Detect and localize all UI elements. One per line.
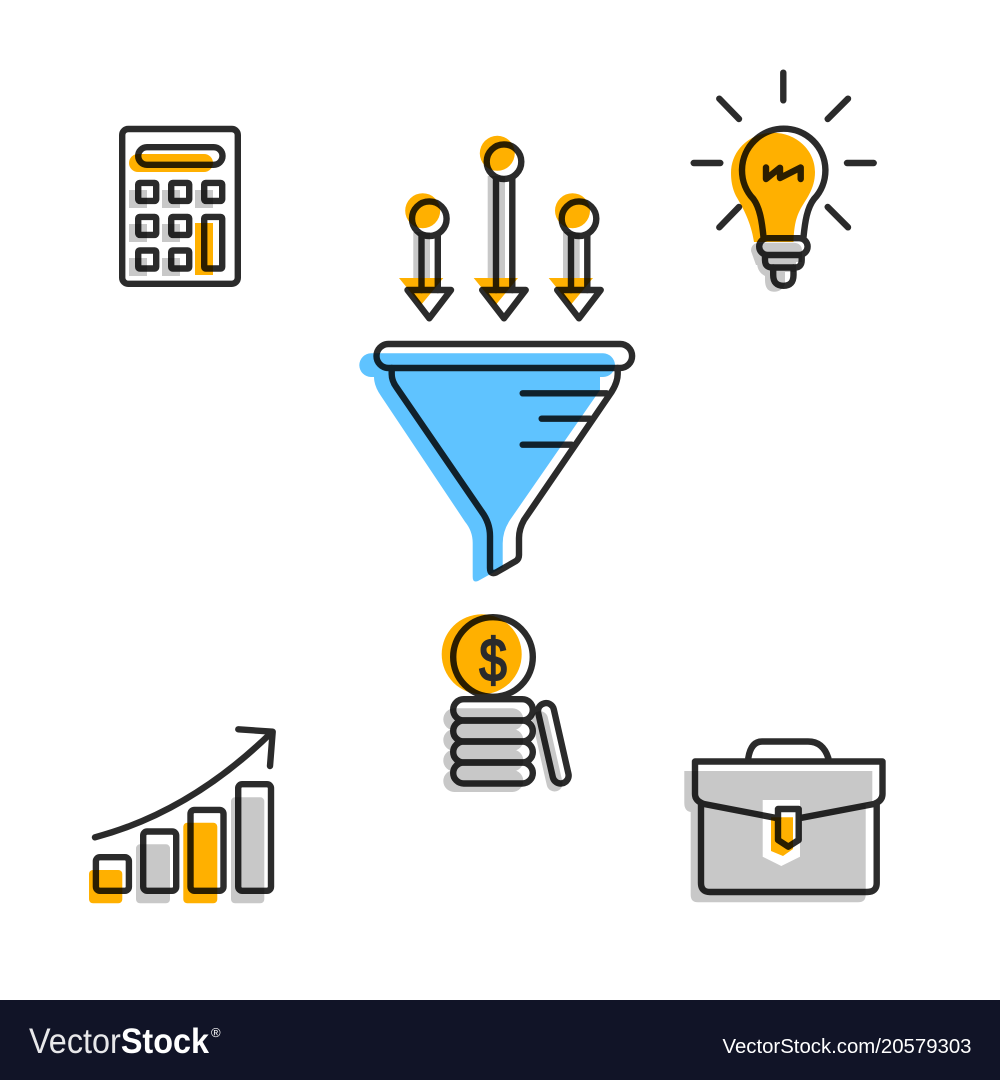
briefcase outline — [695, 742, 882, 892]
funnel blue fill — [359, 353, 615, 582]
bar fills — [89, 797, 264, 903]
clasp yellow fill — [771, 817, 793, 856]
icon: funnel — [359, 344, 632, 582]
coin stack outline — [453, 617, 570, 785]
bulb outline and rays — [694, 73, 874, 286]
coin yellow fill — [442, 614, 522, 694]
arrow: right — [549, 193, 601, 318]
footer bar — [0, 1000, 1000, 1080]
funnel outline — [376, 344, 632, 573]
briefcase grey fill — [684, 771, 872, 902]
icon: light bulb — [694, 73, 874, 292]
dollar sign: $ — [479, 626, 507, 694]
bar outlines and growth arrow — [95, 729, 273, 891]
registered mark: ® — [211, 1025, 221, 1040]
icon: coin stack — [442, 614, 570, 793]
icon: calculator — [122, 129, 238, 284]
bulb yellow fill — [731, 133, 815, 242]
arrow: left — [399, 193, 451, 318]
calculator colour fills — [129, 154, 213, 276]
coin stack shadows — [443, 708, 564, 793]
bulb base shadow — [751, 243, 802, 292]
clasp white backing — [763, 800, 800, 866]
icon: growth bar chart — [89, 729, 273, 903]
footer logo: VectorStock — [29, 1022, 209, 1061]
icon: briefcase — [684, 742, 882, 902]
image id: VectorStock.com/20579303 — [722, 1036, 972, 1058]
arrow: middle — [474, 136, 526, 318]
icon: three falling arrows — [399, 136, 601, 318]
calculator outline — [122, 129, 238, 284]
